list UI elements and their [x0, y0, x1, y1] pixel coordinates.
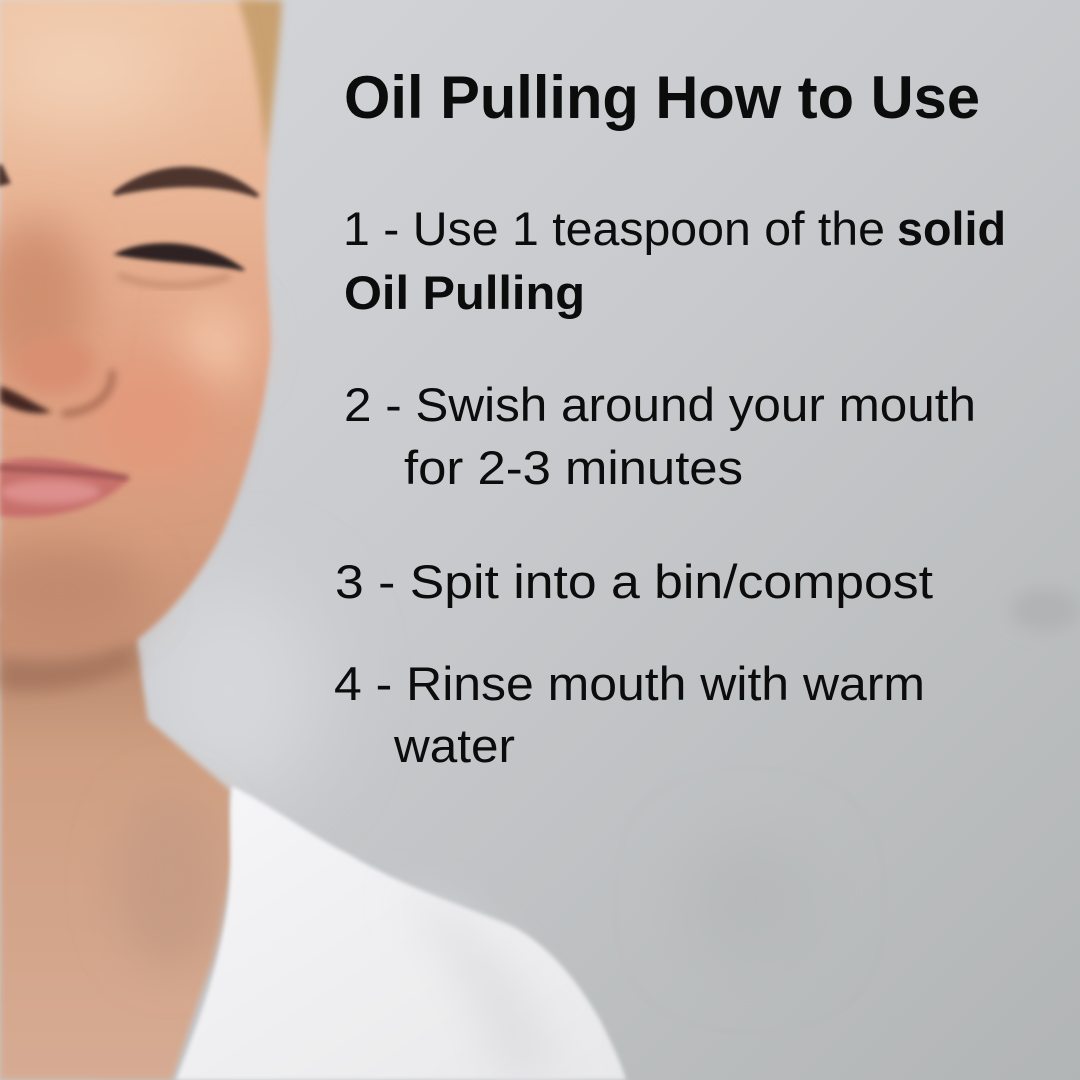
step 4: 4 - Rinse mouth with warm	[334, 657, 925, 710]
neck and chest	[0, 620, 232, 1080]
step 1	[343, 202, 1006, 319]
step 3: 3 - Spit into a bin/compost	[335, 555, 933, 608]
title: Oil Pulling How to Use	[344, 64, 980, 131]
photo: woman's half face	[0, 0, 626, 1080]
step 1: solid	[897, 202, 1006, 255]
chin shadow	[0, 545, 145, 635]
shirt fold shadow	[400, 890, 560, 1080]
lip highlight	[0, 480, 100, 504]
blonde hair	[238, 0, 282, 160]
nostril	[0, 386, 52, 413]
jaw shadow	[0, 645, 136, 691]
step 4: water	[393, 719, 515, 772]
cheek blush	[85, 360, 215, 480]
step 1: Oil Pulling	[344, 266, 585, 319]
white t-shirt	[176, 786, 626, 1080]
nose wing	[62, 370, 112, 414]
step 2: for 2-3 minutes	[404, 441, 743, 494]
nose tip	[15, 337, 95, 393]
collarbone shading	[115, 790, 225, 970]
cheek highlight	[180, 305, 250, 385]
forehead highlight	[0, 20, 180, 120]
eyebrow	[0, 165, 258, 196]
step 4	[334, 657, 925, 772]
eye crease	[118, 275, 230, 286]
face shape	[0, 0, 271, 662]
lip line	[0, 468, 128, 478]
closed eye	[116, 244, 244, 270]
step 2: 2 - Swish around your mouth	[344, 378, 976, 431]
step 2	[344, 378, 976, 494]
step 1: 1 - Use 1 teaspoon of the	[343, 202, 885, 255]
nose shading	[0, 220, 90, 380]
pursed lips	[0, 458, 130, 517]
